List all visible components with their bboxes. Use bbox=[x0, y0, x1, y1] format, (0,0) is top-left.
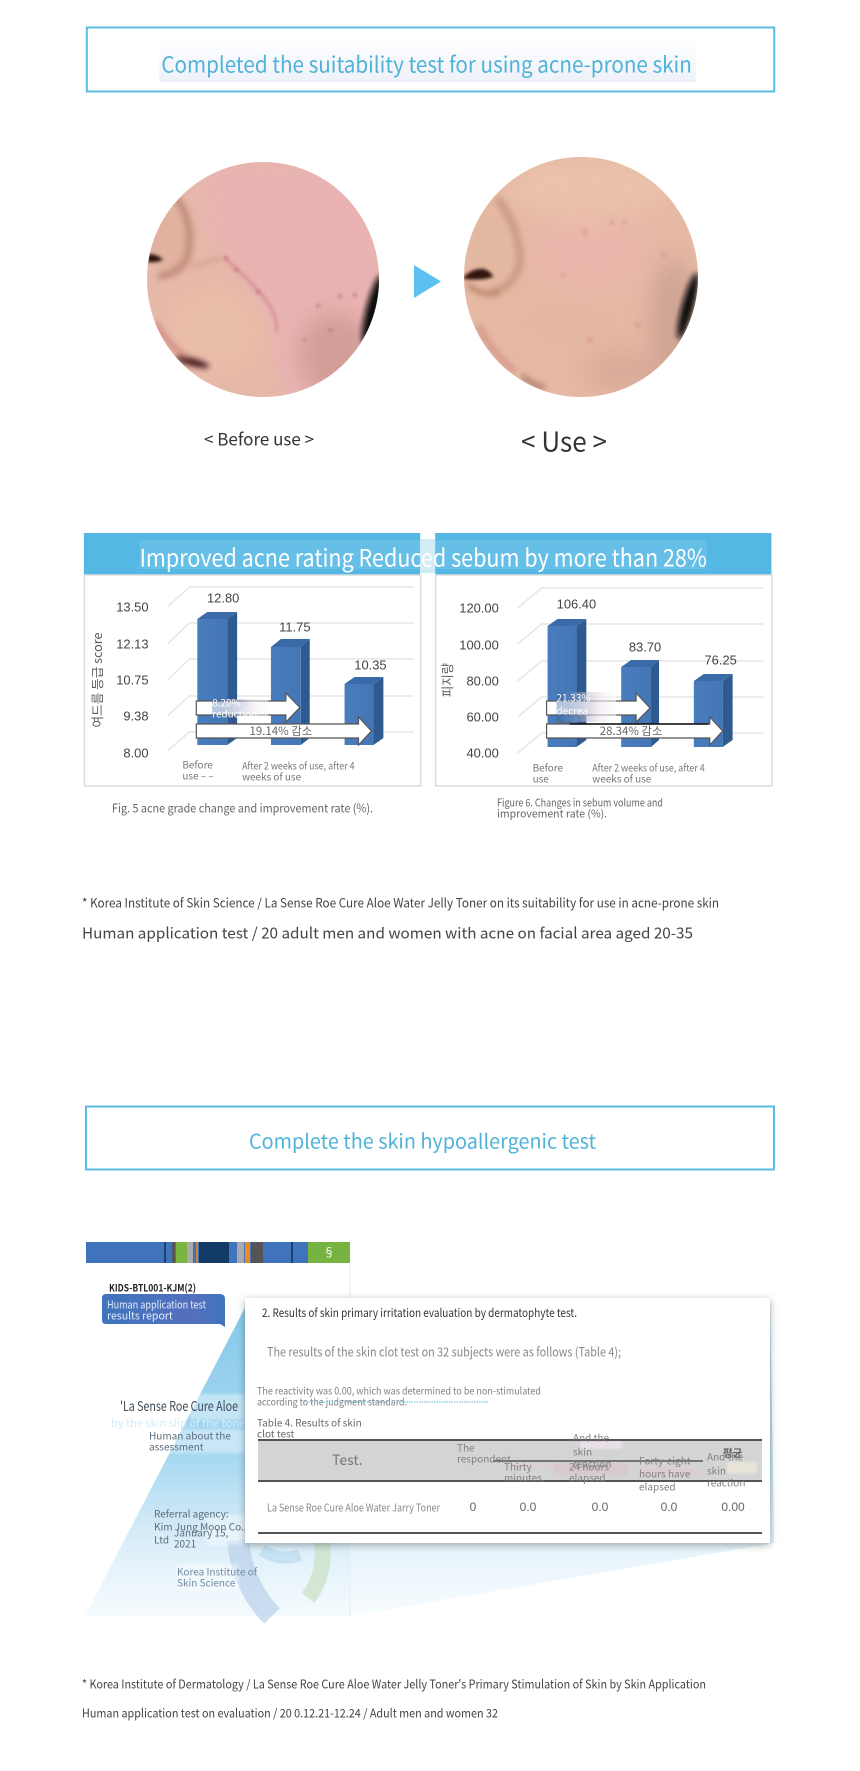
reactivity note bbox=[257, 1382, 541, 1408]
bar: before use 12.80: 12.80 bbox=[207, 590, 239, 606]
y-axis values: 8.00 bbox=[123, 745, 149, 761]
header cells bbox=[332, 1430, 745, 1494]
data row: La Sense Roe Cure Aloe Water Jarry Toner bbox=[267, 1500, 441, 1516]
bar: after 2 weeks 11.75 bbox=[271, 619, 311, 745]
header cells: And the bbox=[573, 1430, 609, 1444]
y-axis values: 10.75 bbox=[116, 672, 149, 688]
panel: sebum chart bbox=[436, 575, 772, 786]
header cells: reaction bbox=[707, 1474, 745, 1490]
header cells: respondent bbox=[457, 1450, 511, 1466]
cover product name bbox=[111, 1395, 250, 1431]
header cells: 평균 bbox=[723, 1446, 743, 1460]
cover referral agency bbox=[154, 1506, 247, 1546]
axis label: acne grade score: 여드름 등급 score bbox=[88, 632, 106, 728]
data row: 0.00 bbox=[721, 1500, 745, 1514]
cover date: 2021 bbox=[174, 1536, 196, 1550]
x-axis labels: Before bbox=[533, 759, 564, 775]
panel: irritation results page bbox=[245, 1298, 770, 1543]
x-axis labels: weeks of use bbox=[592, 770, 652, 786]
photo: skin before use bbox=[147, 162, 379, 397]
reactivity note: according to the judgment standard. bbox=[257, 1394, 407, 1408]
panel: acne grade chart bbox=[84, 575, 421, 786]
data row: 0.0 bbox=[661, 1500, 678, 1514]
cover product name: 'La Sense Roe Cure Aloe bbox=[120, 1395, 238, 1415]
photo: skin after use bbox=[464, 157, 698, 397]
cover text haze bbox=[148, 1394, 245, 1590]
bar: after 2 weeks 83.70: 83.70 bbox=[629, 639, 661, 655]
report code: KIDS-BTL001-KJM(2) bbox=[109, 1280, 196, 1294]
section 2 heading box bbox=[86, 1106, 774, 1170]
chart banner: improved acne rating and reduced sebum: Improved acne rating Reduced sebum by more than 28% bbox=[140, 538, 707, 574]
header cells: skin bbox=[707, 1462, 726, 1478]
x-axis labels: use bbox=[533, 770, 549, 786]
arrow: 8.20% reduction: 8.20% bbox=[212, 694, 241, 710]
caption: figure 6: Figure 6. Changes in sebum volume and bbox=[497, 796, 663, 810]
cover referral agency: Ltd bbox=[154, 1532, 169, 1546]
y-axis values: 12.13 bbox=[116, 636, 149, 652]
results summary: The results of the skin clot test on 32 subjects were as follows (Table 4); bbox=[267, 1342, 621, 1360]
footnote: hypoallergenic test participants: Human application test on evaluation / 20 0.12.21-12.24 / Adult men and women 32 bbox=[82, 1704, 498, 1722]
header cells: elapsed bbox=[639, 1478, 676, 1494]
arrow: 21.33% decrease: 21.33% bbox=[557, 689, 591, 705]
y-axis values bbox=[459, 600, 499, 761]
caption: figure 6 bbox=[497, 796, 663, 822]
y-axis values: 80.00 bbox=[466, 673, 499, 689]
bar: before use 106.40 bbox=[548, 596, 596, 747]
arrow: 8.20% reduction: reduction bbox=[212, 705, 257, 721]
arrow: 8.20% reduction bbox=[196, 693, 300, 722]
report title tag: results report bbox=[107, 1308, 173, 1324]
reactivity note: The reactivity was 0.00, which was determined to be non-stimulated bbox=[257, 1382, 541, 1398]
x-axis labels bbox=[182, 756, 355, 784]
report cover bbox=[85, 1242, 774, 1616]
y-axis values: 13.50 bbox=[116, 599, 149, 615]
cover product name: by the skin slip of the toner bbox=[111, 1415, 250, 1431]
arrow: before to after bbox=[414, 265, 441, 298]
header cells: minutes. bbox=[504, 1470, 545, 1484]
header cells: The bbox=[457, 1440, 475, 1454]
header cells: skin bbox=[573, 1444, 592, 1458]
x-axis labels: After 2 weeks of use, after 4 bbox=[592, 759, 705, 775]
header cells: Forty-eight bbox=[639, 1452, 691, 1468]
header cells: reaction bbox=[573, 1456, 611, 1470]
footnote: acne test participants: Human application test / 20 adult men and women with acne on facial area aged 20-35 bbox=[82, 922, 693, 944]
header cells: And the bbox=[707, 1448, 743, 1464]
cover background arcs bbox=[238, 1540, 323, 1616]
arrow: 21.33% decrease: decrea bbox=[557, 702, 588, 718]
data row: 0.0 bbox=[592, 1500, 609, 1514]
zoom cone bbox=[85, 1298, 774, 1616]
bar: after 2 weeks 83.70 bbox=[621, 639, 661, 747]
table caption: Table 4. Results of skin bbox=[257, 1414, 362, 1430]
arrow: 19.14% decrease bbox=[196, 717, 371, 745]
arrow: 28.34% decrease bbox=[547, 717, 723, 745]
cover institute: Korea Institute of bbox=[177, 1564, 258, 1578]
header cells: elapsed bbox=[569, 1470, 606, 1484]
caption: figure 5: Fig. 5 acne grade change and improvement rate (%). bbox=[112, 800, 373, 816]
x-axis labels: After 2 weeks of use, after 4 bbox=[242, 757, 355, 773]
data row: 0.0 bbox=[520, 1500, 537, 1514]
table caption: clot test bbox=[257, 1426, 294, 1440]
arrow: 21.33% decrease bbox=[547, 689, 650, 730]
cover date bbox=[174, 1524, 228, 1550]
cover date: January 15, bbox=[174, 1524, 228, 1540]
cover referral agency: Referral agency: bbox=[154, 1506, 229, 1520]
cover institute: Skin Science bbox=[177, 1574, 236, 1590]
bar: after 4 weeks 76.25: 76.25 bbox=[705, 652, 737, 668]
header cells: Test. bbox=[332, 1450, 363, 1470]
arrow: 28.34% decrease: 28.34% 감소 bbox=[600, 723, 662, 739]
arrow: 19.14% decrease: 19.14% 감소 bbox=[250, 723, 312, 739]
table caption bbox=[257, 1414, 362, 1440]
cover referral agency: Kim Jung Moon Co., bbox=[154, 1518, 247, 1534]
label: use: < Use > bbox=[521, 420, 607, 460]
y-axis values: 120.00 bbox=[459, 600, 499, 616]
cover assessment label: Human about the bbox=[149, 1428, 231, 1442]
bar: after 4 weeks 10.35 bbox=[345, 657, 387, 745]
cover colour stripe bbox=[86, 1242, 350, 1263]
footnote: dermatology institute source: * Korea Institute of Dermatology / La Sense Roe Cure Aloe Water Jelly Toner's Primary Stimulation of Skin by Skin Application bbox=[82, 1676, 706, 1692]
cover assessment label bbox=[149, 1428, 231, 1454]
x-axis labels: use – – bbox=[182, 767, 214, 783]
y-axis values bbox=[116, 599, 149, 761]
results heading: 2. Results of skin primary irritation evaluation by dermatophyte test. bbox=[262, 1305, 577, 1321]
y-axis values: 40.00 bbox=[466, 745, 499, 761]
cover colour stripe: § bbox=[323, 1244, 335, 1260]
bar: before use 106.40: 106.40 bbox=[557, 596, 596, 612]
header cells: hours have bbox=[639, 1466, 691, 1480]
footnote: acne suitability test source: * Korea Institute of Skin Science / La Sense Roe Cure Aloe Water Jelly Toner on its suitability for use in acne-prone skin bbox=[82, 892, 719, 912]
cover assessment label: assessment bbox=[149, 1438, 204, 1454]
bar: before use 12.80 bbox=[197, 590, 239, 745]
data row bbox=[267, 1500, 745, 1516]
y-axis values: 60.00 bbox=[466, 709, 499, 725]
section 2 heading box: Complete the skin hypoallergenic test bbox=[249, 1126, 596, 1154]
label: before use: < Before use > bbox=[204, 426, 314, 450]
x-axis labels: weeks of use bbox=[242, 768, 302, 784]
x-axis labels: Before bbox=[182, 756, 213, 772]
axis label: sebum amount: 피지량 bbox=[438, 662, 456, 697]
header cells: 24 hours bbox=[569, 1458, 609, 1474]
bar: after 2 weeks 11.75: 11.75 bbox=[279, 619, 311, 635]
bar: after 4 weeks 10.35: 10.35 bbox=[354, 657, 387, 673]
data row: 0 bbox=[470, 1500, 477, 1514]
arrow: 21.33% decrease: the bbox=[557, 714, 572, 730]
x-axis labels bbox=[533, 759, 705, 786]
table 4 bbox=[258, 1430, 762, 1533]
header cells: Thirty bbox=[504, 1458, 532, 1474]
y-axis values: 100.00 bbox=[459, 637, 499, 653]
section 1 heading box bbox=[87, 28, 774, 92]
report title tag: Human application test bbox=[107, 1298, 206, 1312]
report title tag bbox=[102, 1294, 225, 1327]
caption: figure 6: improvement rate (%). bbox=[497, 806, 607, 822]
section 1 heading box: Completed the suitability test for using acne-prone skin bbox=[161, 48, 692, 80]
y-axis values: 9.38 bbox=[123, 708, 149, 724]
bar: after 4 weeks 76.25 bbox=[694, 652, 737, 747]
cover institute bbox=[177, 1564, 258, 1590]
